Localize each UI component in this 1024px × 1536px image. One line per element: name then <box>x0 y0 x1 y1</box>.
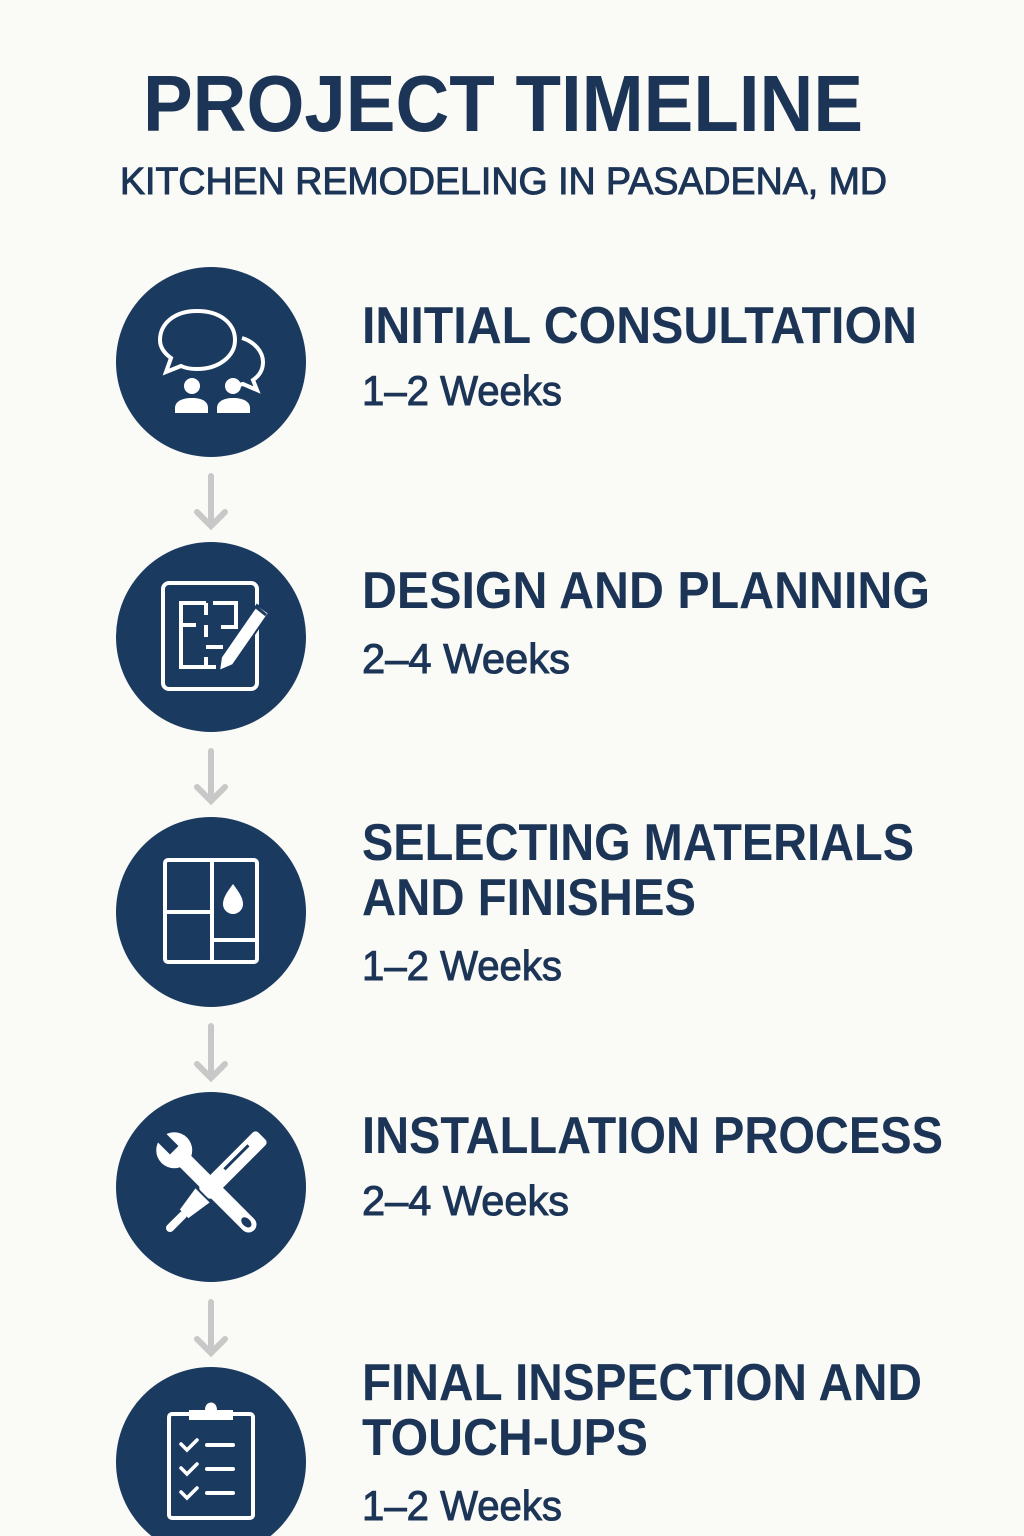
arrow 4 <box>197 1302 225 1353</box>
icon: consultation circle <box>116 267 306 457</box>
subtitle: KITCHEN REMODELING IN PASADENA, MD <box>120 161 887 203</box>
heading: INSTALLATION PROCESS <box>362 1107 943 1165</box>
heading: FINAL INSPECTION AND <box>362 1354 922 1412</box>
step 3: selecting materials: AND FINISHES <box>362 869 696 927</box>
step 4: installation <box>116 1092 943 1282</box>
step 1: initial consultation <box>116 267 917 457</box>
duration: 2–4 Weeks <box>362 635 570 682</box>
icon: material samples <box>116 817 306 1007</box>
arrow 2 <box>197 751 225 801</box>
heading: SELECTING MATERIALS <box>362 814 914 872</box>
heading: INITIAL CONSULTATION <box>362 297 917 355</box>
step 5: final inspection <box>116 1354 922 1536</box>
title: PROJECT TIMELINE <box>143 59 863 148</box>
arrow 3 <box>197 1026 225 1078</box>
icon: wrench and screwdriver <box>116 1092 306 1282</box>
step 3: selecting materials <box>116 814 914 1007</box>
duration: 1–2 Weeks <box>362 1482 562 1529</box>
heading: DESIGN AND PLANNING <box>362 562 930 620</box>
step 2: design and planning <box>116 542 930 732</box>
duration: 2–4 Weeks <box>362 1177 569 1224</box>
step 5: final inspection: TOUCH-UPS <box>362 1409 648 1467</box>
icon: clipboard checklist <box>116 1367 306 1536</box>
arrow 1 <box>197 476 225 526</box>
duration: 1–2 Weeks <box>362 367 562 414</box>
duration: 1–2 Weeks <box>362 942 562 989</box>
icon: floor plan with pencil <box>116 542 306 732</box>
